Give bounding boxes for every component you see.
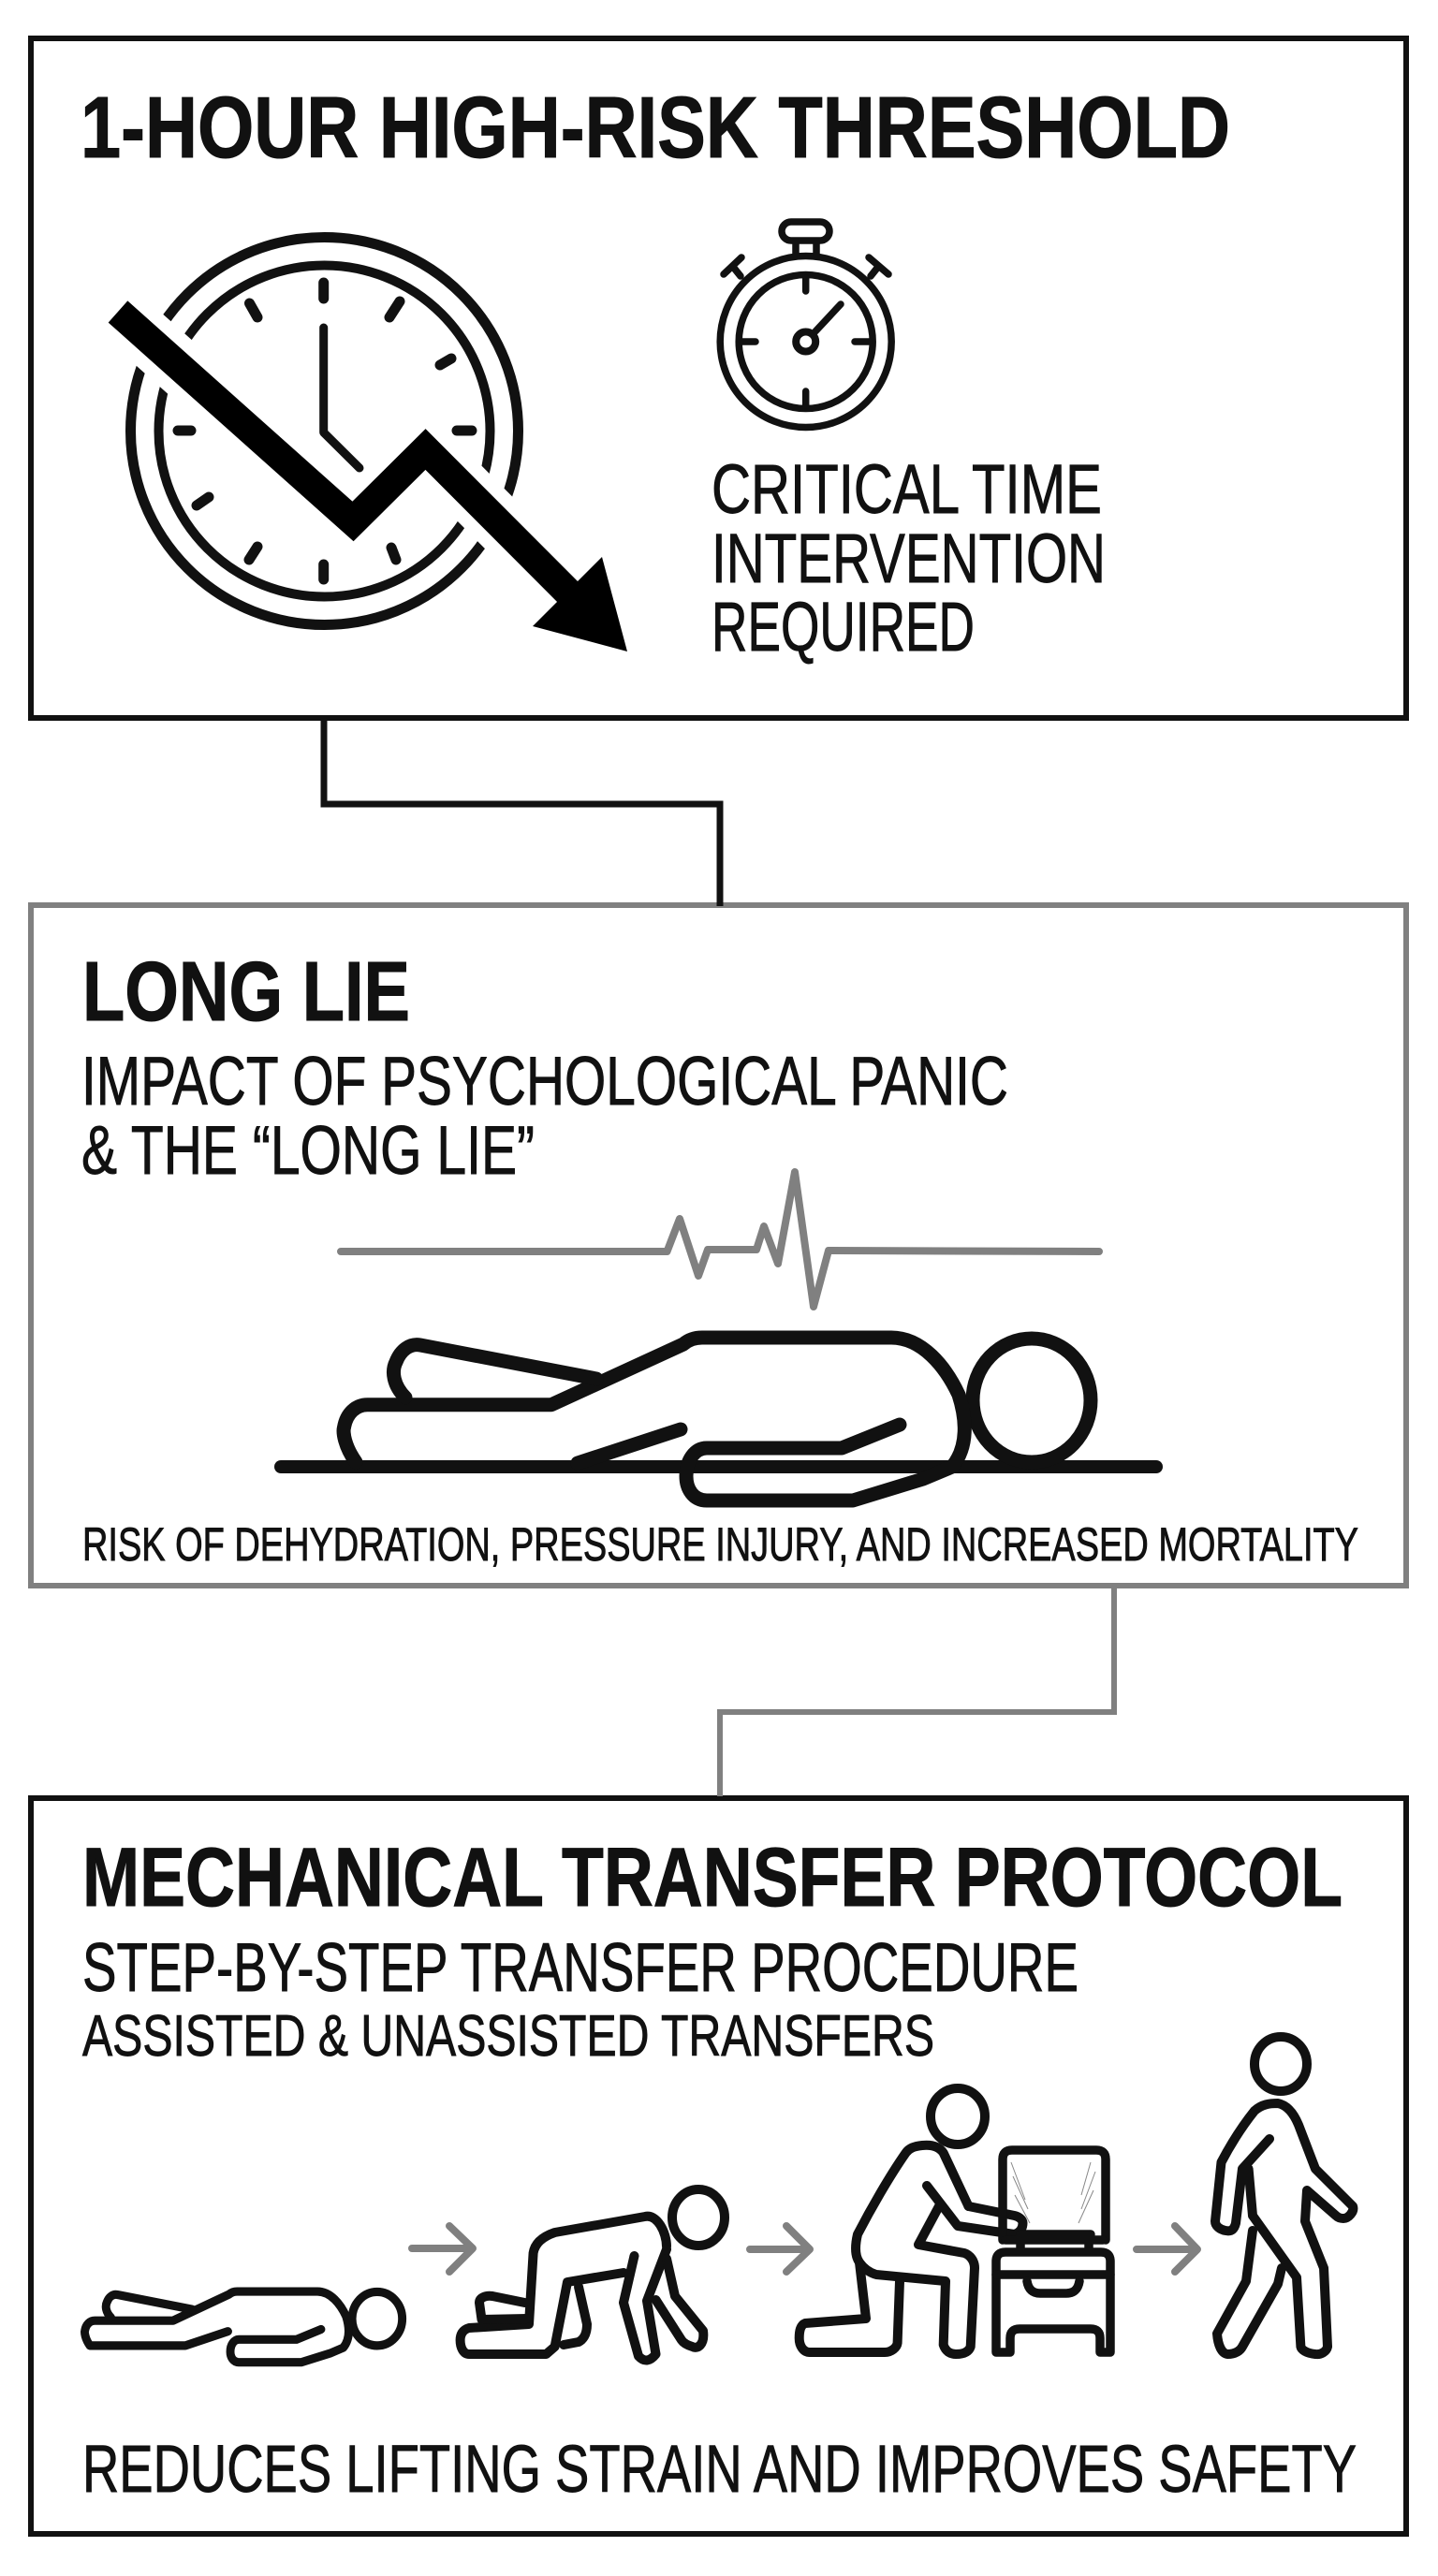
- panel: 1-hour high-risk threshold: [31, 38, 1406, 718]
- commode chair: [996, 2150, 1110, 2352]
- icon: step 3 person kneeling at commode: [800, 2088, 1110, 2354]
- connector stub: [717, 1783, 723, 1796]
- icon: step 2 person crawling: [461, 2189, 725, 2361]
- subheading: STEP-BY-STEP TRANSFER PROCEDURE: [82, 1930, 1078, 2006]
- panel frame: [31, 905, 1406, 1586]
- text: critical time intervention required: [712, 450, 1106, 666]
- icon: step 4 person walking: [1215, 2037, 1353, 2354]
- arrow: step 2 to 3: [750, 2226, 810, 2272]
- icon: step 1 person lying: [85, 2291, 403, 2363]
- heading: 1-HOUR HIGH-RISK THRESHOLD: [81, 79, 1230, 176]
- subheading: [82, 1930, 1078, 2069]
- connector stub: [717, 894, 723, 906]
- kneeling person: [800, 2088, 1022, 2354]
- arrow: step 1 to 2: [412, 2226, 473, 2272]
- subheading: IMPACT OF PSYCHOLOGICAL PANIC: [81, 1044, 1008, 1120]
- panel: mechanical transfer protocol: [31, 1783, 1406, 2534]
- panel: long lie: [31, 894, 1406, 1586]
- icon: clock with falling arrow: [118, 238, 627, 651]
- icon: stopwatch: [720, 222, 891, 427]
- arrow: step 3 to 4: [1137, 2226, 1197, 2272]
- glass hatching: [1011, 2162, 1095, 2223]
- subheading: & THE “LONG LIE”: [81, 1113, 535, 1189]
- connector: threshold to long lie: [324, 719, 720, 905]
- connector: long lie to transfer protocol: [720, 1586, 1114, 1798]
- subheading: ASSISTED & UNASSISTED TRANSFERS: [82, 2004, 934, 2069]
- subheading: [81, 1044, 1008, 1189]
- chart: heartbeat line: [341, 1172, 1099, 1307]
- text: critical time intervention required: REQUIRED: [712, 588, 975, 666]
- heading: LONG LIE: [82, 945, 410, 1039]
- text: critical time intervention required: CRITICAL TIME: [712, 450, 1102, 528]
- icon: person lying on floor: [281, 1338, 1156, 1500]
- panel frame: [31, 38, 1406, 718]
- panel frame: [31, 1798, 1406, 2534]
- text: critical time intervention required: INTERVENTION: [712, 520, 1106, 597]
